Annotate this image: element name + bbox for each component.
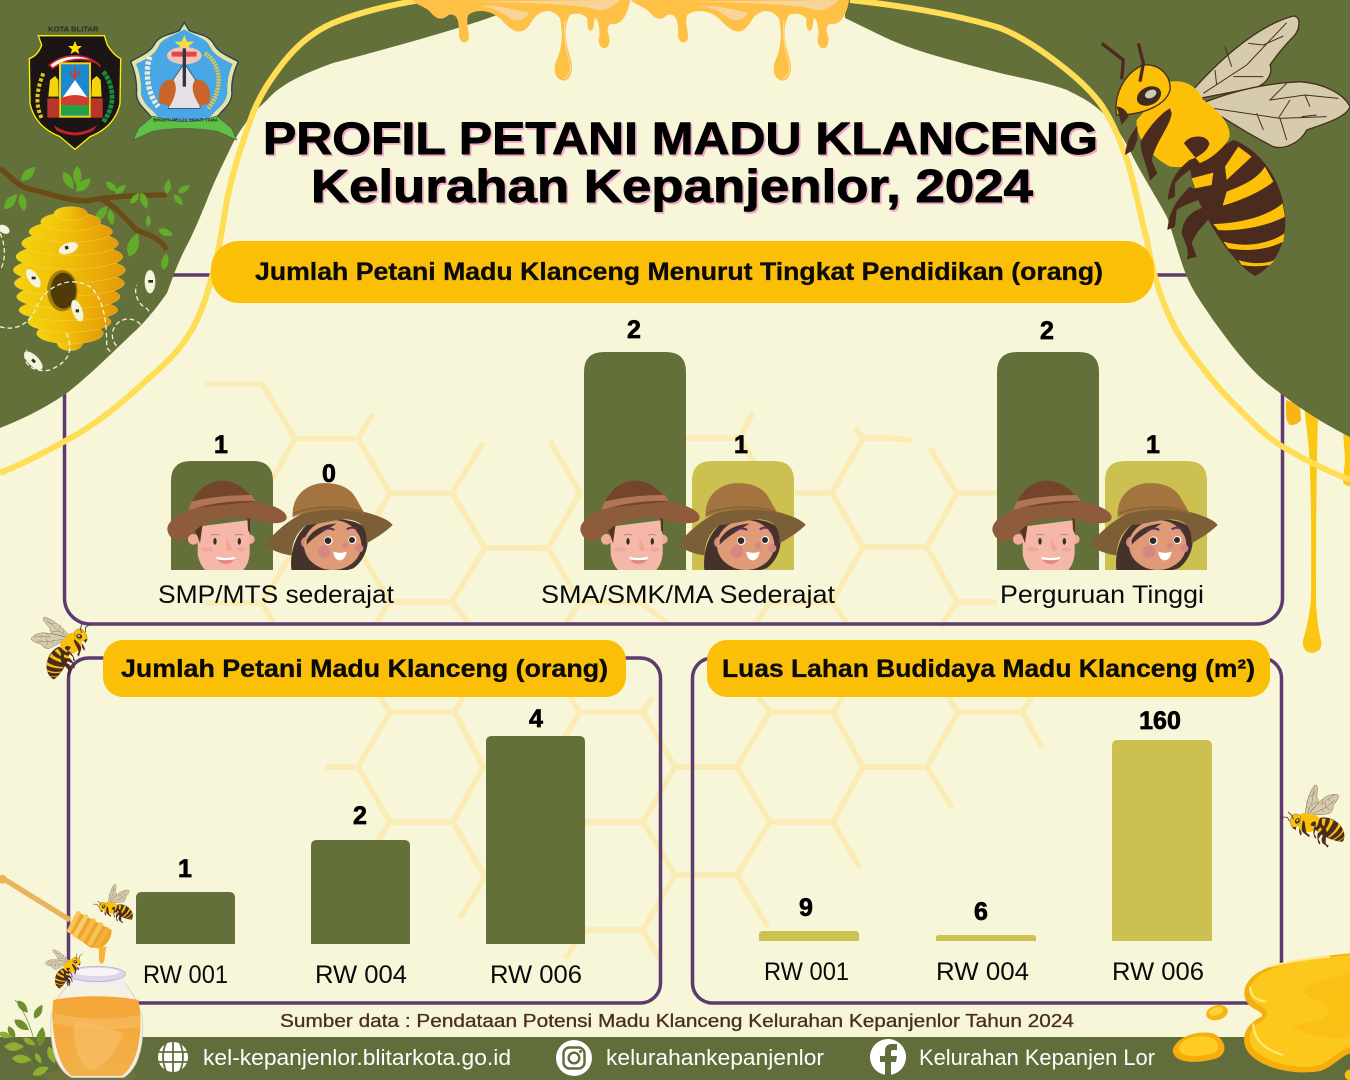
bar chart: land area per RW: 9 — [799, 894, 813, 922]
yellow curve: right — [850, 0, 1350, 480]
emblem: Kota Blitar — [29, 25, 121, 149]
bar: SMA female — [692, 461, 794, 570]
footer bar — [0, 1037, 1350, 1080]
farmer icon: male university — [992, 481, 1112, 570]
illustration: bee right edge — [1277, 777, 1350, 863]
heading pill: farmers per RW — [103, 640, 626, 697]
bar: SMA male — [584, 352, 686, 570]
bar: university male — [997, 352, 1099, 570]
illustration: bee top left of lower panels — [31, 617, 91, 679]
category labels: SMP/MTS sederajat — [158, 581, 394, 609]
heading pill: land area: Luas Lahan Budidaya Madu Klanceng (m²) — [722, 655, 1255, 683]
value labels: 1 — [1146, 431, 1160, 459]
farmer icon: male SMP — [167, 481, 287, 570]
title: Kelurahan Kepanjenlor, 2024 — [311, 160, 1033, 212]
honeycomb pattern: farmers per RW panel — [325, 697, 690, 960]
bar: SMP male — [171, 461, 273, 570]
footer: website: kel-kepanjenlor.blitarkota.go.id — [203, 1045, 511, 1070]
value labels: 1 — [734, 431, 748, 459]
panel frame: land area — [692, 658, 1282, 1003]
illustration: honey jar — [43, 966, 143, 1080]
bar chart: land area per RW: RW 001 — [764, 958, 849, 986]
bar chart: farmers per RW: RW 006 — [490, 961, 582, 989]
value labels — [214, 316, 1160, 488]
bar chart: farmers per RW: 1 — [178, 855, 192, 883]
footer: instagram — [556, 1040, 824, 1076]
value labels: 2 — [627, 316, 641, 344]
category labels: SMA/SMK/MA Sederajat — [541, 581, 835, 609]
green corner shape: top right — [845, 0, 1350, 437]
panel frame: education — [64, 275, 1282, 624]
heading pill: education — [211, 241, 1154, 303]
heading pill: land area — [707, 640, 1270, 697]
bar chart: land area per RW: 160 — [1139, 707, 1181, 735]
heading pill: farmers per RW: Jumlah Petani Madu Klanceng (orang) — [121, 655, 608, 683]
bar chart: land area per RW: RW 006 — [1112, 958, 1204, 986]
honey drips: top — [412, 0, 849, 81]
title: PROFIL PETANI MADU KLANCENG — [263, 113, 1098, 164]
illustration: honey hive on branch — [0, 164, 192, 373]
farmer icon: female SMP — [265, 483, 393, 573]
emblem: Kelurahan — [131, 23, 238, 140]
farmer icon: male SMA — [580, 481, 700, 570]
emblem: Kelurahan: BHAKTI PRAJA MUKTI TAMA — [153, 117, 219, 122]
bar chart: farmers per RW: RW 001 — [143, 961, 228, 989]
footer: instagram: kelurahankepanjenlor — [606, 1045, 824, 1070]
bar: university female — [1105, 461, 1207, 570]
value labels: 2 — [1040, 317, 1054, 345]
green corner shape: top left — [0, 0, 500, 428]
bar chart: land area per RW — [759, 707, 1212, 986]
emblem: Kota Blitar: KOTA BLITAR — [48, 25, 99, 34]
bar chart: farmers per RW — [136, 705, 585, 989]
footer: facebook: Kelurahan Kepanjen Lor — [919, 1045, 1155, 1070]
honey drips: right edge — [1286, 400, 1350, 653]
bar chart: land area per RW: RW 004 — [936, 958, 1029, 986]
category labels — [158, 581, 1204, 609]
heading pill: education: Jumlah Petani Madu Klanceng Menurut Tingkat Pendidikan (orang) — [255, 258, 1103, 286]
illustration: leaves beside jar — [0, 998, 58, 1078]
illustration: honey dipper — [0, 875, 112, 964]
value labels: 1 — [214, 431, 228, 459]
farmer icon: female university — [1090, 483, 1218, 573]
honeycomb pattern: education panel — [205, 384, 997, 627]
panel frame: farmers per RW — [68, 658, 660, 1003]
bar chart: farmers by education — [158, 316, 1218, 609]
illustration: bee above dipper — [91, 879, 144, 933]
source note: Sumber data : Pendataan Potensi Madu Klanceng Kelurahan Kepanjenlor Tahun 2024 — [280, 1011, 1074, 1031]
bar chart: farmers per RW: 4 — [529, 705, 543, 733]
illustration: honey puddle — [1173, 953, 1350, 1080]
illustration: bee on jar — [45, 950, 83, 989]
illustration: large bee — [1102, 16, 1350, 276]
bar chart: farmers per RW: RW 004 — [315, 961, 407, 989]
honeycomb pattern: land area panel — [690, 697, 1042, 927]
footer: facebook — [870, 1039, 1155, 1075]
bar chart: farmers per RW: 2 — [353, 802, 367, 830]
category labels: Perguruan Tinggi — [1000, 581, 1204, 609]
value labels: 0 — [322, 460, 336, 488]
bar chart: land area per RW: 6 — [974, 898, 988, 926]
farmer icon: female SMA — [678, 483, 806, 573]
title — [263, 113, 1098, 212]
yellow curve: left — [0, 0, 420, 473]
